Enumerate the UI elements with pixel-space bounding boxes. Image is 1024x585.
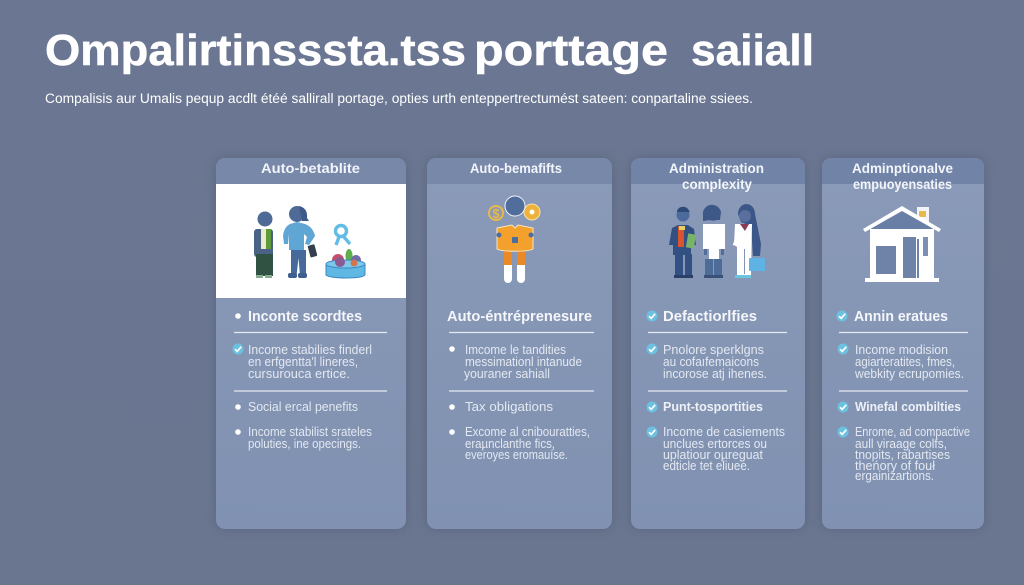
title: saiiall — [691, 26, 814, 75]
list item: income: Inconte scordtes — [248, 309, 362, 325]
list item: enrome: ergainizartions. — [855, 469, 934, 483]
list item: income — [449, 343, 594, 391]
list item: rates: Income stabilist srateles — [248, 425, 372, 439]
panel header — [631, 158, 805, 184]
list item: winefal: Winefal combilties — [855, 400, 961, 414]
list item: income — [234, 309, 387, 332]
list item: income: unclues ertorces ou — [663, 437, 767, 451]
list item: enrome: Enrome, ad compactive — [855, 425, 970, 439]
panel header — [822, 158, 984, 184]
panel: administrative employers — [822, 158, 984, 529]
heading: complexity — [682, 177, 752, 192]
panel: auto-benefits — [427, 158, 612, 529]
list item: enrome: tnopits, rabartises — [855, 448, 950, 462]
icon: key ribbon — [336, 226, 350, 245]
list item: income: Income modision — [855, 343, 948, 357]
title: porttage — [474, 26, 668, 75]
list item: pnolore — [646, 343, 787, 391]
icon: person with coins: $ — [492, 206, 500, 221]
list item: rates: poluties, ine opecings. — [248, 437, 361, 451]
list item: annin: Annin eratues — [854, 309, 948, 325]
heading — [852, 161, 953, 192]
list item: income: agiarteratites, fmes, — [855, 355, 955, 369]
list item: excome: everoyes eromauíse. — [465, 448, 568, 462]
icon: person with coins — [489, 196, 540, 283]
panel header — [216, 158, 406, 184]
list item: income — [646, 425, 785, 473]
list item: enrome: aull viraage colfs, — [855, 437, 947, 451]
list item: income: Imcome le tandities — [465, 343, 566, 357]
list item: excome: Excome al cnibouratties, — [465, 425, 590, 439]
list item: excome: eraµnclanthe fics, — [465, 437, 555, 451]
list item: tax: Tax obligations — [465, 400, 553, 414]
list item: enrome — [838, 425, 970, 483]
title: Ompalirtinsssta.tss — [45, 26, 466, 75]
list item: stability: cursurouca ertice. — [248, 367, 350, 381]
list item: income: edticle tet eliuee. — [663, 459, 750, 473]
panel header — [427, 158, 612, 184]
illustration panel — [216, 184, 406, 298]
list item: income: messimationl intanude — [465, 355, 582, 369]
list item: income: Income de casiements — [663, 425, 785, 439]
list item: pnolore: incorose atj ihenes. — [663, 367, 767, 381]
heading — [669, 161, 764, 192]
list item: defactiorlfies — [646, 309, 787, 332]
icon: woman with briefcase — [733, 204, 765, 278]
heading: Auto-bemafifts — [470, 161, 562, 176]
list item: stability: en erfgentta'l lineres, — [248, 355, 358, 369]
heading: Adminptionalve — [852, 161, 953, 176]
icon: house — [863, 206, 941, 282]
list item: stability — [232, 343, 387, 391]
list item: rates — [235, 425, 372, 451]
list item: auto-entrepreneur: Auto-éntréprenesure — [447, 309, 592, 325]
icon: man with folder — [669, 207, 696, 278]
panel: auto-betablite — [216, 158, 406, 529]
list item: punt-tosportities: Punt-tosportities — [663, 400, 763, 414]
list item: defactiorlfies: Defactiorlfies — [663, 309, 757, 325]
list item: income — [838, 343, 968, 391]
title — [45, 26, 814, 75]
heading: Administration — [669, 161, 764, 176]
icon: woman in white coat — [703, 205, 725, 278]
heading: empuoyensaties — [853, 177, 952, 192]
list item: annin — [836, 309, 968, 332]
icon: bowl — [326, 249, 365, 278]
list item: pnolore: Pnolore sperklgns — [663, 343, 764, 357]
list item: enrome: theńory of fouł — [855, 459, 935, 473]
icon: man — [254, 212, 273, 278]
icon: woman — [283, 206, 317, 278]
list item: pnolore: au cofaıfemaicons — [663, 355, 759, 369]
heading: Auto-betablite — [261, 161, 361, 176]
list item: social: Social ercal penefits — [248, 400, 358, 414]
list item: excome — [449, 425, 590, 462]
panel: administration complexity — [631, 158, 805, 529]
list item: stability: Income stabilies finderl — [248, 343, 372, 357]
list item: income: uplatiour oµreguat — [663, 448, 764, 462]
list item: income: youraner sahiall — [464, 367, 550, 381]
list item: income: webkity ecrupomies. — [854, 367, 964, 381]
subtitle: Compalisis aur Umalis pequp acdlt étéé sallirall portage, opties urth enteppertrectumést sateen: conpartaline ssiees. — [45, 91, 753, 106]
